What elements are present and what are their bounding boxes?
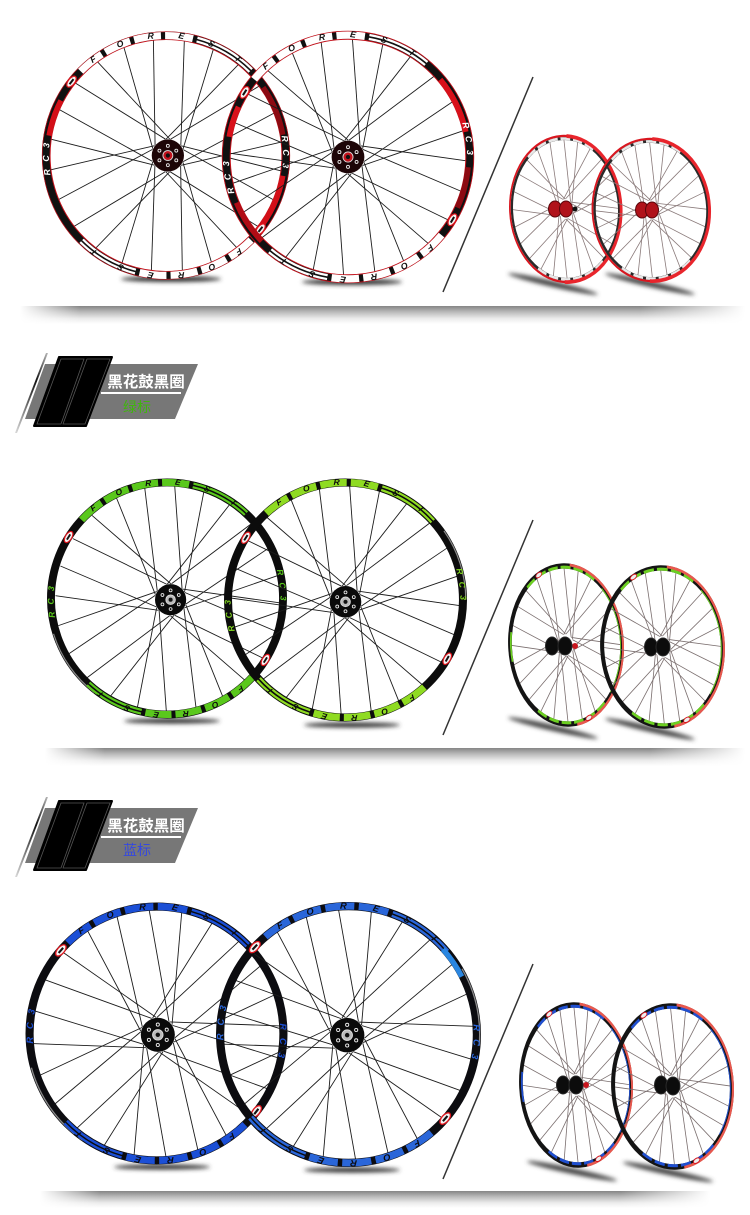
small wheel hubs bbox=[556, 1076, 680, 1095]
label badge: blue bbox=[15, 797, 198, 877]
large wheel: left: RC3 bbox=[42, 142, 50, 175]
badge slanted line bbox=[15, 353, 48, 433]
large wheel: left: RC3 bbox=[26, 1009, 35, 1044]
ground shadow bar bbox=[20, 305, 745, 325]
badge rule bbox=[101, 836, 181, 838]
badge black panels bbox=[34, 357, 112, 426]
small wheel shadows bbox=[526, 1159, 714, 1184]
badge colour name: 绿标 bbox=[123, 399, 151, 415]
large wheel: left: FOREST bbox=[90, 248, 242, 278]
large wheel: left: FOREST bbox=[78, 904, 239, 935]
large wheel shadows bbox=[124, 718, 400, 728]
ground shadow bar bbox=[45, 747, 745, 767]
large wheel: right: FOREST bbox=[279, 244, 434, 283]
large wheel: left: RC3 bbox=[276, 570, 286, 600]
large wheel: left: RC3 bbox=[282, 136, 290, 168]
large wheel: left: FOREST bbox=[74, 1132, 234, 1164]
large wheel: left bbox=[26, 902, 288, 1164]
large wheel: right: RC3 bbox=[224, 600, 235, 631]
large wheel: right: RC3 bbox=[216, 1005, 226, 1040]
large wheel: left: RC3 bbox=[48, 586, 55, 618]
large wheel shadows bbox=[114, 1164, 400, 1173]
divider line bbox=[443, 964, 533, 1179]
large wheel: right bbox=[224, 478, 467, 722]
badge grey band bbox=[25, 364, 198, 419]
large wheel: right: FOREST bbox=[262, 31, 417, 70]
small wheel shadows bbox=[508, 715, 695, 742]
large wheel: right: FOREST bbox=[276, 479, 425, 512]
large wheel: left: FOREST bbox=[90, 479, 238, 512]
divider line bbox=[443, 77, 533, 292]
badge heading: 黑花鼓黑圈 bbox=[107, 816, 185, 835]
section: red and black wheelset bbox=[24, 30, 738, 322]
large wheel: right: FOREST bbox=[258, 1128, 420, 1167]
large wheel: left: FOREST bbox=[90, 32, 242, 64]
small wheel: left bbox=[506, 133, 625, 285]
large wheel: right bbox=[216, 902, 481, 1167]
badge colour name: 蓝标 bbox=[123, 842, 151, 858]
small wheel: left bbox=[505, 562, 627, 728]
badge heading: 黑花鼓黑圈 bbox=[107, 372, 185, 391]
badge slanted line bbox=[15, 797, 48, 877]
small wheel: right bbox=[597, 563, 728, 731]
large wheel: left bbox=[42, 31, 290, 280]
large wheel: right: RC3 bbox=[456, 569, 466, 600]
small wheel: right bbox=[608, 1001, 737, 1172]
large wheel: right: RC3 bbox=[472, 1024, 480, 1060]
badge grey band bbox=[25, 808, 198, 863]
large wheel: right bbox=[222, 30, 474, 284]
large wheel: right: FOREST bbox=[277, 902, 439, 940]
small wheel: left bbox=[516, 1001, 636, 1169]
large wheel: left: RC3 bbox=[278, 1024, 286, 1058]
small wheel: right bbox=[589, 136, 713, 284]
small wheel hubs bbox=[548, 201, 658, 218]
ground shadow bar bbox=[40, 1190, 710, 1209]
small wheel hubs bbox=[546, 637, 670, 656]
label badge: green bbox=[15, 353, 198, 433]
section: green and black wheelset bbox=[47, 478, 738, 764]
large wheel: right: FOREST bbox=[266, 688, 414, 721]
large wheel shadows bbox=[121, 276, 402, 285]
badge rule bbox=[101, 392, 181, 394]
large wheel: right: RC3 bbox=[222, 161, 234, 194]
divider line bbox=[443, 520, 533, 735]
large wheel: left bbox=[47, 478, 287, 718]
small wheel shadows bbox=[508, 271, 695, 297]
large wheel: left: FOREST bbox=[96, 685, 244, 718]
large wheel: right: RC3 bbox=[462, 122, 474, 155]
section: blue and black wheelset bbox=[26, 902, 734, 1206]
badge black panels bbox=[34, 801, 112, 870]
